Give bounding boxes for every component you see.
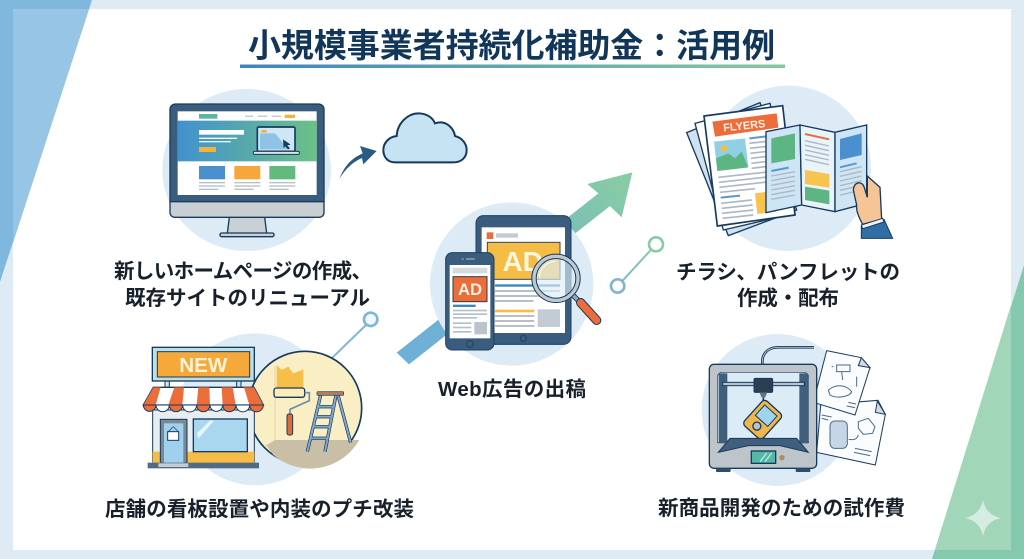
- title underline: [240, 64, 785, 68]
- growth arrow: [397, 172, 632, 364]
- icon: shop and interior renovation: [143, 333, 362, 485]
- icon: flyers and brochure in hand: FLYERS: [723, 118, 766, 135]
- icon: shop and interior renovation: NEW: [179, 354, 228, 377]
- title: 小規模事業者持続化補助金：活用例: [248, 27, 775, 64]
- item: web ads: [430, 202, 597, 401]
- decoration: green corner triangle: [932, 265, 1024, 559]
- icon: tablet, phone and magnifier: AD: [458, 280, 482, 299]
- icon: cloud: [383, 113, 467, 162]
- connector: right: [611, 237, 663, 293]
- icon: monitor with website: [162, 89, 331, 251]
- decoration: blue corner triangle: [0, 0, 92, 282]
- label: storefront: 店舗の看板設置や内装のプチ改装: [105, 498, 414, 521]
- label: web ads: Web広告の出稿: [438, 378, 586, 401]
- label: homepage: 既存サイトのリニューアル: [125, 287, 370, 310]
- label: flyers: 作成・配布: [737, 286, 839, 310]
- arrow: to cloud: [339, 146, 377, 179]
- label: prototype: 新商品開発のための試作費: [658, 497, 905, 520]
- icon: tablet, phone and magnifier: [430, 202, 597, 366]
- connector: bottom left: [332, 313, 377, 358]
- icon: 3D printer and blueprints: [702, 334, 885, 486]
- label: flyers: [676, 261, 900, 310]
- item: flyers: [676, 86, 900, 310]
- icon: tablet, phone and magnifier: AD: [502, 246, 543, 277]
- item: homepage: [114, 89, 467, 310]
- item: prototype: [658, 334, 905, 520]
- label: homepage: 新しいホームページの作成、: [114, 259, 372, 283]
- icon: sparkle: [965, 500, 1001, 536]
- item: storefront: [105, 333, 414, 521]
- label: flyers: チラシ、パンフレットの: [676, 261, 900, 284]
- icon: flyers and brochure in hand: [687, 86, 893, 251]
- label: homepage: [114, 259, 372, 310]
